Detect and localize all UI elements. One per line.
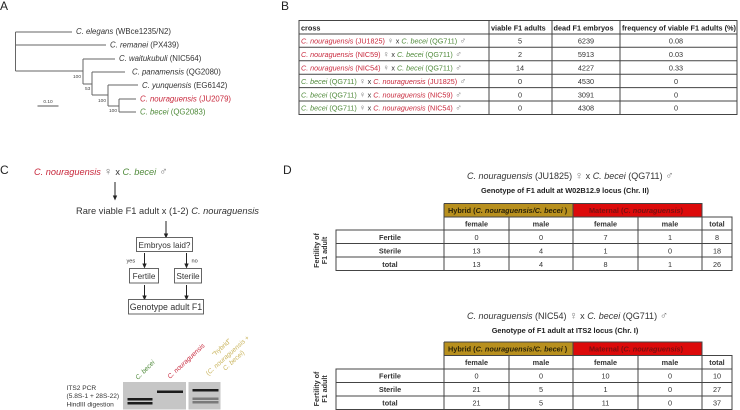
table values: 0.03 — [669, 50, 683, 59]
panel: A phylogenetic tree — [0, 0, 231, 116]
table 1: 18 — [713, 246, 721, 256]
box: embryos laid — [136, 238, 192, 252]
bootstrap values: 53 — [85, 86, 91, 92]
table 2: 21 — [472, 385, 481, 394]
taxon labels — [76, 27, 231, 116]
taxon labels: C. becei (QG2083) — [140, 108, 206, 116]
cross labels: C. nouraguensis (NIC54) ♀ x C. becei (QG711) ♂ — [301, 62, 462, 72]
cross title: C. nouraguensis ♀ x C. becei ♂ — [34, 166, 168, 178]
table 2 title: C. nouraguensis (NIC54) ♀ x C. becei (QG711) ♂ — [467, 310, 668, 322]
table 1 — [312, 204, 732, 270]
table values: 0 — [518, 104, 522, 112]
table 2 — [312, 342, 732, 410]
table 1: 4 — [539, 246, 543, 256]
table 1: male — [533, 220, 549, 228]
table 1: 0 — [539, 233, 543, 242]
table header: viable F1 adults — [491, 24, 546, 32]
taxon labels: C. waitukubuli (NIC564) — [119, 54, 202, 63]
table 1: F1 adult — [320, 236, 329, 264]
table 1: Fertile — [379, 233, 401, 242]
box: sterile: Sterile — [176, 272, 200, 281]
table 1: 1 — [668, 233, 672, 242]
box: sterile — [174, 268, 202, 283]
table 1: male — [662, 220, 678, 228]
box: fertile: Fertile — [133, 272, 156, 281]
table 1: 1 — [668, 260, 672, 269]
table values: 4308 — [578, 104, 594, 112]
yes label: yes — [126, 258, 135, 264]
cross labels — [301, 36, 466, 112]
box: embryos laid: Embryos laid? — [139, 241, 191, 250]
table 1: 1 — [603, 246, 608, 256]
table values: 0.33 — [669, 64, 683, 72]
table values: 0 — [674, 77, 678, 86]
table 2: male — [533, 358, 549, 367]
table values: 2 — [518, 50, 522, 59]
PCR label: (5.8S-1 + 28S-22) — [66, 393, 119, 400]
table values: 0 — [518, 90, 522, 100]
table 1: total — [382, 260, 398, 269]
table 1: total — [709, 220, 725, 228]
cross labels: C. becei (QG711) ♀ x C. nouraguensis (NIC59) ♂ — [301, 90, 462, 100]
table 1: Sterile — [379, 246, 401, 256]
table 1: 8 — [603, 260, 608, 269]
table values — [516, 36, 683, 112]
table 2: 10 — [713, 372, 721, 380]
table 2: female — [465, 358, 488, 367]
table 1: 0 — [474, 233, 479, 242]
gel image — [123, 382, 220, 410]
table 2: 0 — [539, 372, 543, 380]
tree branches — [16, 32, 138, 112]
table grid — [299, 20, 737, 114]
table values: 14 — [516, 64, 524, 72]
table 1: 4 — [539, 260, 543, 269]
F1 adult cross text: Rare viable F1 adult x (1-2) C. nouraguensis — [76, 206, 259, 216]
taxon labels: C. nouraguensis (JU2079) — [140, 94, 231, 104]
table 2: Sterile — [379, 385, 401, 394]
table values: 5913 — [578, 50, 594, 59]
table 2: 0 — [668, 398, 672, 408]
PCR label: HindIII digestion — [66, 402, 114, 408]
gel lane labels: C. becei — [134, 359, 157, 381]
box: genotype adult F1 — [128, 300, 204, 314]
flow arrows — [115, 182, 186, 298]
taxon labels: C. panamensis (QG2080) — [132, 68, 221, 76]
table 2: 27 — [713, 385, 721, 394]
panel: D genotype tables — [283, 163, 732, 410]
table values: 5 — [518, 36, 522, 46]
table 2: F1 adult — [320, 375, 329, 403]
table header: frequency of viable F1 adults (%) — [622, 24, 737, 32]
table 2: Maternal (C. nouraguensis) — [589, 344, 684, 354]
table 2: 5 — [539, 385, 543, 394]
table 2: total — [382, 398, 398, 408]
gel lane labels: (C. nouraguensis + — [205, 334, 251, 377]
table header — [301, 24, 737, 32]
PCR label: ITS2 PCR — [66, 385, 96, 392]
table 2: 11 — [602, 398, 609, 408]
panel: C crossing scheme — [0, 163, 259, 410]
panel: B cross table — [281, 0, 737, 114]
table 1: Maternal (C. nouraguensis) — [589, 206, 684, 215]
table 1: 8 — [715, 233, 719, 242]
scale bar — [38, 99, 58, 106]
PCR label — [66, 385, 119, 408]
no label: no — [192, 258, 198, 264]
table 2: Hybrid (C. nouraguensis/C. becei ) — [448, 344, 568, 354]
table 1 subtitle: Genotype of F1 adult at W02B12.9 locus (Chr. II) — [481, 186, 650, 195]
table 2 subtitle: Genotype of F1 adult at ITS2 locus (Chr. I) — [492, 326, 639, 335]
table 2: 0 — [668, 385, 672, 394]
table header: dead F1 embryos — [554, 24, 614, 32]
taxon labels: C. remanei (PX439) — [110, 40, 179, 50]
table 1: female — [465, 220, 488, 228]
table 2: 0 — [474, 372, 479, 380]
table 1: 13 — [472, 260, 481, 269]
table values: 0 — [674, 104, 678, 112]
table 1: Hybrid (C. nouraguensis/C. becei ) — [448, 206, 568, 215]
table 2: male — [662, 358, 678, 367]
cross labels: C. becei (QG711) ♀ x C. nouraguensis (NIC54) ♂ — [301, 102, 462, 112]
taxon labels: C. yunquensis (EG6142) — [142, 81, 228, 90]
table 2: 5 — [539, 398, 543, 408]
scale bar: 0.10 — [43, 99, 53, 105]
table 2: 10 — [601, 372, 610, 380]
cross labels: C. becei (QG711) ♀ x C. nouraguensis (JU1825) ♂ — [301, 76, 466, 86]
bootstrap values — [73, 74, 117, 114]
bootstrap values: 100 — [98, 98, 106, 104]
table 2: total — [709, 358, 725, 367]
table values: 0 — [518, 77, 522, 86]
table 2: Fertility of — [312, 371, 321, 406]
table 1: 13 — [472, 246, 481, 256]
table 2: 0 — [668, 372, 672, 380]
table 1: 0 — [668, 246, 672, 256]
table 1: 7 — [603, 233, 608, 242]
label C: C — [0, 163, 9, 177]
bootstrap values: 100 — [73, 74, 81, 80]
table 2: 21 — [472, 398, 481, 408]
gel lane labels: "hybrid" — [211, 337, 233, 358]
table values: 4530 — [578, 77, 594, 86]
table 2: Fertile — [379, 372, 401, 380]
gel lane labels: C. nouraguensis — [167, 342, 207, 380]
table values: 6239 — [578, 36, 594, 46]
table 2: 1 — [603, 385, 608, 394]
table values: 0 — [674, 90, 678, 100]
label D: D — [283, 163, 292, 177]
box: fertile — [130, 268, 158, 283]
table values: 3091 — [578, 90, 594, 100]
bootstrap values: 100 — [109, 108, 117, 114]
gel lane labels: C. becei) — [222, 349, 246, 372]
table 1: 26 — [713, 260, 721, 269]
table header: cross — [301, 24, 320, 32]
table 1 title: C. nouraguensis (JU1825) ♀ x C. becei (QG711) ♂ — [467, 170, 674, 182]
table 1: female — [594, 220, 617, 228]
table values: 4227 — [578, 64, 594, 72]
table 2: 37 — [713, 398, 721, 408]
taxon labels: C. elegans (WBce1235/N2) — [76, 27, 171, 36]
cross labels: C. nouraguensis (JU1825) ♀ x C. becei (QG711) ♂ — [301, 36, 466, 46]
cross labels: C. nouraguensis (NIC59) ♀ x C. becei (QG711) ♂ — [301, 49, 462, 59]
gel lane labels — [134, 334, 251, 381]
table 1: Fertility of — [312, 233, 321, 268]
box: genotype adult F1: Genotype adult F1 — [130, 302, 202, 312]
table values: 0.08 — [669, 36, 683, 46]
table 2: female — [594, 358, 617, 367]
